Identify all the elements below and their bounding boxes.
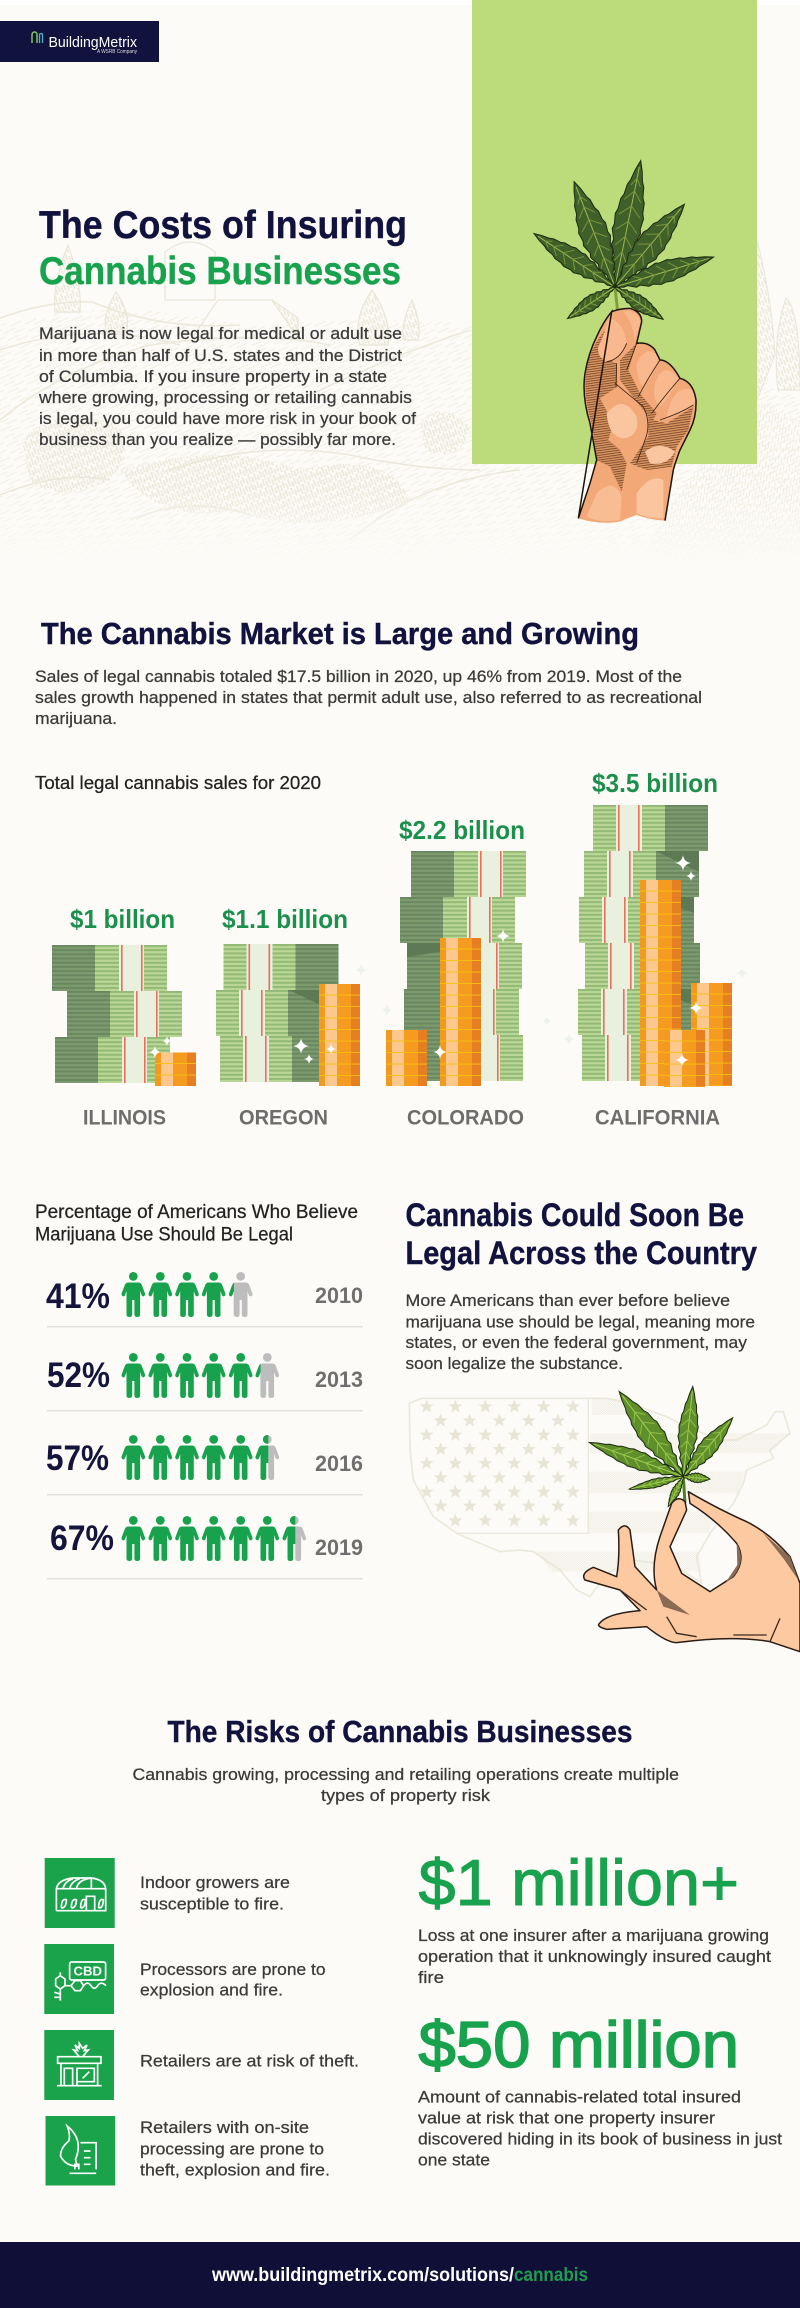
risks heading: The Risks of Cannabis Businesses [168,1714,632,1749]
logo: BuildingMetrix [48,34,137,51]
chart: sales by state [52,768,748,1130]
row: 2016: 57% [46,1439,109,1478]
title: Cannabis Businesses [39,250,401,293]
pictogram chart: support by year [46,1272,363,1580]
icon: CBD molecule [44,1944,114,2014]
market paragraph: Sales of legal cannabis totaled $17.5 billion in 2020, up 46% from 2019. Most of the [35,667,682,686]
risk: indoor growers: Indoor growers are [140,1873,290,1892]
stat: $1 million+: Loss at one insurer after a marijuana growing [418,1926,769,1945]
stat: $50 million: Amount of cannabis-related total insured [418,2088,741,2106]
intro paragraph [38,324,416,449]
bar: California: $3.5 billion [592,768,718,798]
intro paragraph: where growing, processing or retailing cannabis [38,388,412,407]
risk: retailers with on-site processing: processing are prone to [140,2140,324,2158]
risk: processors: explosion and fire. [140,1980,283,2000]
intro paragraph: is legal, you could have more risk in your book of [39,409,416,428]
intro paragraph: in more than half of U.S. states and the District [39,346,402,365]
title [39,204,407,293]
illustration: hand holding cannabis leaf [528,158,717,523]
row: 2019: 2019 [315,1535,363,1560]
bar: Oregon: $1.1 billion [222,904,348,934]
row: 2010: 2010 [315,1283,363,1308]
icon: pinching hand [584,1492,800,1652]
risk: retailers with on-site processing [46,2116,330,2186]
risk: retailers with on-site processing: theft, explosion and fire. [140,2160,330,2180]
bar: Colorado [386,815,526,1130]
legalization paragraph: soon legalize the substance. [406,1354,623,1373]
chart title: Total legal cannabis sales for 2020 [35,773,321,793]
bar: Colorado: $2.2 billion [399,815,525,845]
bar: Colorado: COLORADO [407,1106,524,1130]
stat: $50 million [418,2008,782,2170]
green hero panel [472,0,757,464]
map of US flag [409,1398,790,1597]
title: The Costs of Insuring [39,204,407,247]
bar: Oregon: OREGON [239,1106,328,1130]
bar: California [578,768,732,1130]
stat: $50 million: $50 million [418,2008,739,2081]
icon: fist [578,308,696,523]
legalization paragraph: More Americans than ever before believe [406,1291,730,1310]
poll heading [35,1202,358,1246]
legalization heading: Cannabis Could Soon Be [406,1197,744,1233]
bar: Illinois [52,904,196,1130]
icon: greenhouse [45,1858,115,1928]
risks subheading: types of property risk [321,1786,491,1805]
row: 2013: 2013 [315,1367,363,1392]
logo [0,21,159,62]
icon: CBD molecule: CBD [74,1964,102,1978]
logo: A WSRB Company [97,49,137,55]
intro paragraph: of Columbia. If you insure property in a state [39,367,387,386]
risks subheading: Cannabis growing, processing and retailing operations create multiple [132,1765,679,1784]
poll heading: Marijuana Use Should Be Legal [35,1224,293,1246]
footer: www.buildingmetrix.com/solutions/ [211,2265,515,2286]
footer: cannabis [514,2265,588,2286]
row: 2016 [46,1435,363,1496]
risks subheading [132,1765,679,1805]
legalization paragraph [406,1291,755,1373]
stat: $50 million: value at risk that one property insurer [418,2108,715,2128]
market paragraph: marijuana. [35,709,117,728]
risk: retailers: Retailers are at risk of theft. [140,2052,359,2070]
background farm landscape sketch [0,240,800,570]
risk: indoor growers: susceptible to fire. [140,1894,284,1914]
icon: cannabis leaf [528,158,717,325]
row: 2013: 52% [47,1356,110,1395]
market paragraph: sales growth happened in states that permit adult use, also referred to as recreational [35,688,702,707]
footer [0,2242,800,2308]
risk: retailers [44,2030,359,2100]
row: 2010 [46,1272,363,1328]
icon: flame and building [46,2116,115,2186]
legalization heading: Legal Across the Country [406,1235,757,1271]
stat: $50 million: discovered hiding in its book of business in just [418,2130,782,2148]
risk: retailers with on-site processing: Retailers with on-site [140,2118,309,2137]
icon: storefront [44,2030,114,2100]
icon: leaf [586,1384,739,1508]
legalization paragraph: states, or even the federal government, may [406,1333,748,1352]
bar: Illinois: $1 billion [70,904,175,934]
illustration: US flag map with hand and leaf [409,1384,800,1652]
bar: California: CALIFORNIA [595,1106,720,1130]
legalization heading [406,1197,757,1271]
stat: $1 million+: operation that it unknowingly insured caught [418,1947,771,1966]
stat: $1 million+: $1 million+ [418,1846,739,1919]
risk: processors: Processors are prone to [140,1960,326,1979]
bar: Oregon [216,904,360,1130]
bar: Illinois: ILLINOIS [83,1106,166,1130]
poll heading: Percentage of Americans Who Believe [35,1202,358,1223]
stat: $50 million: one state [418,2150,490,2170]
stat: $1 million+: fire [418,1968,444,1987]
risk: indoor growers [45,1858,290,1928]
legalization paragraph: marijuana use should be legal, meaning more [406,1312,755,1332]
risk: processors [44,1944,326,2014]
row: 2019: 67% [50,1519,114,1558]
row: 2013 [47,1353,363,1412]
intro paragraph: Marijuana is now legal for medical or adult use [39,324,402,343]
row: 2019 [47,1516,363,1580]
row: 2010: 41% [46,1277,110,1316]
market paragraph [35,667,702,728]
market heading: The Cannabis Market is Large and Growing [41,616,639,651]
row: 2016: 2016 [315,1451,363,1476]
stat: $1 million+ [418,1846,771,1987]
intro paragraph: business than you realize — possibly far more. [39,430,396,449]
